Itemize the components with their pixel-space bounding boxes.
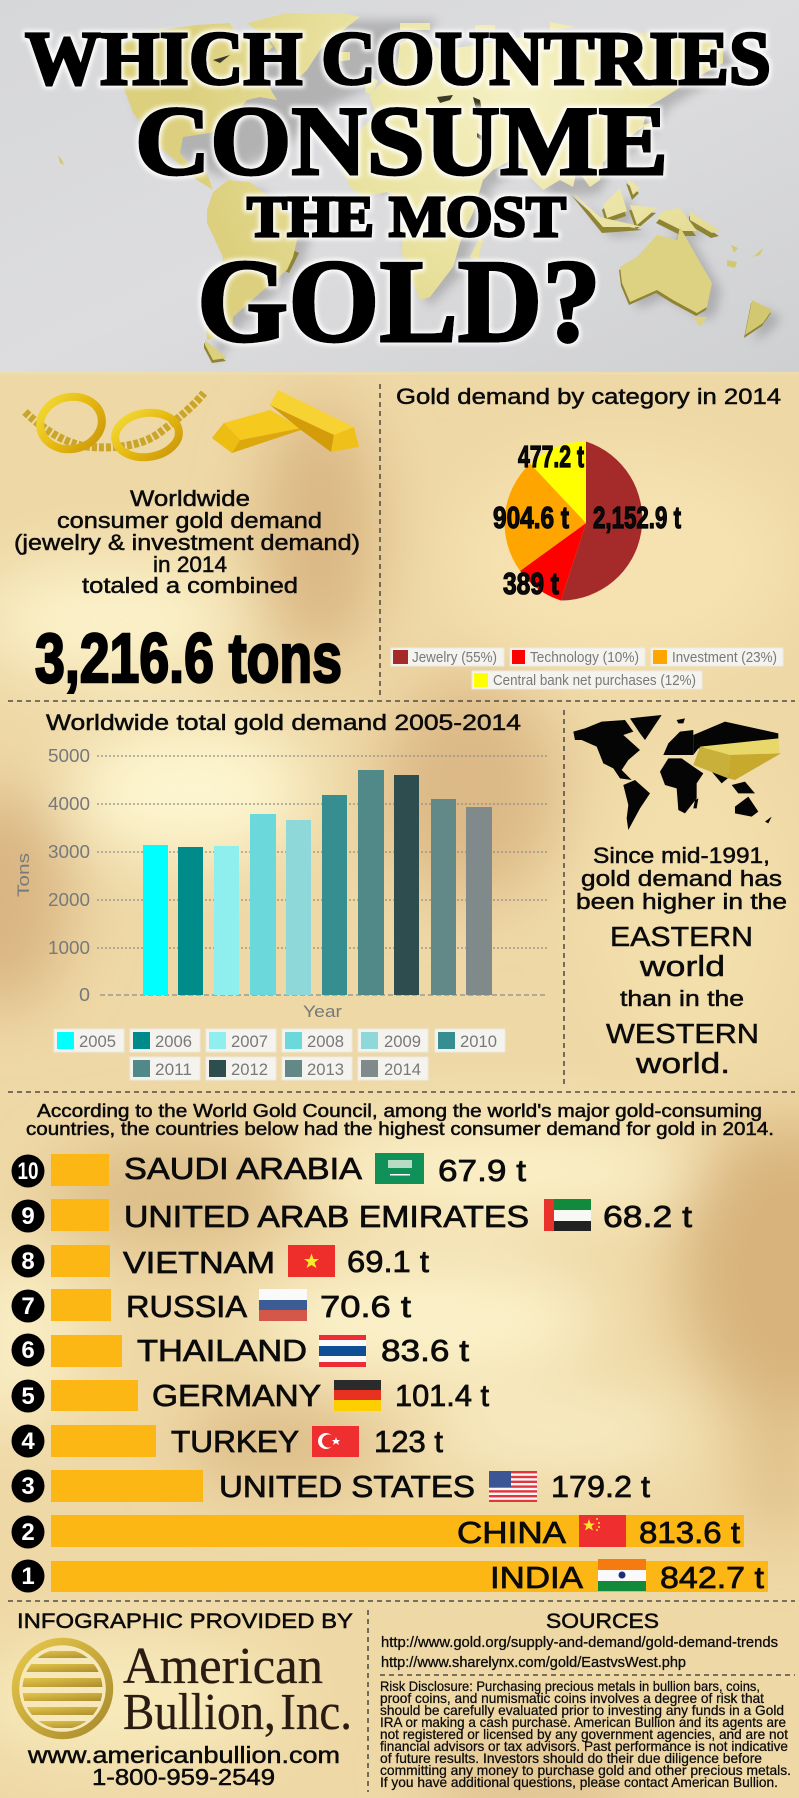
rank 10: Saudi Arabia bbox=[12, 1151, 526, 1188]
bar chart legend: 2006 bbox=[155, 1032, 192, 1051]
rank 8: Vietnam bbox=[12, 1244, 429, 1280]
pie legend: Investment (23%) bbox=[672, 649, 777, 666]
bar chart: 1000 bbox=[48, 938, 90, 958]
rank 7: Russia bbox=[12, 1289, 411, 1324]
logo: American Bullion bbox=[15, 1638, 352, 1741]
rank 10: Saudi Arabia: SAUDI ARABIA bbox=[124, 1151, 362, 1186]
rank 7: Russia: RUSSIA bbox=[126, 1289, 247, 1324]
pie chart: 904.6 t bbox=[493, 500, 569, 535]
bar chart legend: 2011 bbox=[155, 1060, 192, 1079]
risk disclosure: proof coins, and numismatic coins involves a degree of risk that bbox=[380, 1690, 764, 1706]
pie chart: 2,152.9 t bbox=[593, 500, 681, 535]
pie chart: 389 t bbox=[503, 566, 559, 601]
bar chart legend bbox=[54, 1029, 505, 1080]
text: worldwide consumer gold demand: consumer gold demand bbox=[57, 508, 322, 533]
title: WHICH COUNTRIES bbox=[25, 17, 771, 101]
map inland water bbox=[213, 55, 490, 143]
intro text bbox=[26, 1101, 774, 1139]
bar chart legend: 2005 bbox=[79, 1032, 116, 1051]
rank 5: Germany: 5 bbox=[21, 1383, 35, 1410]
text: worldwide consumer gold demand: in 2014 bbox=[153, 552, 227, 577]
panel: consumer gold demand bbox=[14, 390, 360, 697]
risk disclosure: should be carefully evaluated prior to investing any funds in a Gold bbox=[380, 1702, 784, 1718]
rank 9: United Arab Emirates: 9 bbox=[21, 1203, 35, 1230]
bar chart: Year bbox=[303, 1002, 342, 1021]
pie chart: 477.2 t bbox=[518, 439, 584, 474]
bar chart legend: 2014 bbox=[384, 1060, 421, 1079]
rank 4: Turkey: 4 bbox=[21, 1428, 35, 1455]
pie chart bbox=[493, 439, 681, 601]
text: since mid-1991: world bbox=[639, 951, 725, 983]
rank 1: India: 1 bbox=[21, 1563, 35, 1590]
rank 3: United States: UNITED STATES bbox=[219, 1469, 475, 1504]
page background: gold texture bbox=[0, 375, 799, 1798]
bar chart bbox=[14, 746, 548, 1021]
rank 1: India bbox=[12, 1559, 768, 1595]
rank 4: Turkey: 123 t bbox=[374, 1424, 443, 1459]
rank 10: Saudi Arabia: 10 bbox=[18, 1158, 38, 1185]
bar chart: 4000 bbox=[48, 794, 90, 814]
heading: sources: SOURCES bbox=[546, 1610, 659, 1633]
bar chart: 3000 bbox=[48, 842, 90, 862]
bar chart legend: 2007 bbox=[231, 1032, 268, 1051]
source links: http://www.gold.org/supply-and-demand/gold-demand-trends bbox=[381, 1634, 778, 1651]
big number: 3,216.6 tons: 3,216.6 tons bbox=[35, 619, 342, 697]
bar chart legend: 2009 bbox=[384, 1032, 421, 1051]
rank 4: Turkey bbox=[12, 1424, 443, 1459]
bar chart legend: 2008 bbox=[307, 1032, 344, 1051]
risk disclosure bbox=[380, 1678, 791, 1790]
rank 6: Thailand bbox=[12, 1333, 469, 1368]
rank 6: Thailand: 6 bbox=[21, 1337, 35, 1364]
rank 8: Vietnam: 8 bbox=[21, 1248, 35, 1275]
rank 9: United Arab Emirates: UNITED ARAB EMIRATES bbox=[124, 1199, 529, 1234]
rank 5: Germany bbox=[12, 1378, 489, 1413]
rank 2: China bbox=[12, 1515, 744, 1550]
contact details: www.americanbullion.com bbox=[27, 1742, 340, 1768]
map continents bbox=[58, 13, 772, 360]
title: GOLD? bbox=[197, 235, 601, 367]
heading: gold demand by category: Gold demand by category in 2014 bbox=[396, 384, 781, 409]
rank 8: Vietnam: 69.1 t bbox=[347, 1244, 429, 1279]
text: since mid-1991: than in the bbox=[620, 986, 744, 1011]
rank 3: United States bbox=[12, 1469, 650, 1504]
intro text: According to the World Gold Council, among the world's major gold-consuming bbox=[37, 1101, 762, 1121]
logo: American Bullion: American bbox=[123, 1638, 323, 1695]
risk disclosure: If you have additional questions, please contact American Bullion. bbox=[380, 1774, 778, 1790]
heading: worldwide total gold demand: Worldwide total gold demand 2005-2014 bbox=[46, 710, 521, 735]
rank 1: India: 842.7 t bbox=[660, 1560, 764, 1595]
panel: top ten countries bbox=[12, 1101, 774, 1595]
rank 2: China: 2 bbox=[21, 1519, 35, 1546]
panel: gold demand by category bbox=[391, 384, 783, 689]
text: since mid-1991: Since mid-1991, bbox=[593, 843, 770, 868]
title bbox=[25, 17, 771, 367]
icon: black world map with gold bar bbox=[573, 715, 781, 830]
text: since mid-1991: been higher in the bbox=[576, 889, 787, 914]
bar chart: 0 bbox=[79, 985, 90, 1005]
rank 10: Saudi Arabia: 67.9 t bbox=[438, 1153, 526, 1188]
rank 9: United Arab Emirates: 68.2 t bbox=[603, 1199, 692, 1234]
panel: infographic provided by bbox=[15, 1610, 353, 1790]
header panel: world map background bbox=[0, 0, 799, 375]
contact details bbox=[27, 1742, 340, 1790]
rank 9: United Arab Emirates bbox=[12, 1199, 692, 1234]
text: since mid-1991: EASTERN bbox=[610, 921, 753, 952]
panel: eastern vs western demand bbox=[573, 715, 787, 1080]
logo: American Bullion: Bullion, Inc. bbox=[123, 1684, 352, 1741]
risk disclosure: not registered or licensed by any government agencies, and are not bbox=[380, 1726, 788, 1742]
risk disclosure: financial advisors or tax advisors. Past performance is not indicative bbox=[380, 1738, 788, 1754]
contact details: 1-800-959-2549 bbox=[92, 1764, 275, 1790]
pie legend bbox=[391, 648, 783, 689]
bar chart legend: 2010 bbox=[460, 1032, 497, 1051]
pie legend: Technology (10%) bbox=[530, 649, 639, 666]
risk disclosure: committing any money to purchase gold and other precious metals. bbox=[380, 1762, 791, 1778]
text: worldwide consumer gold demand: (jewelry & investment demand) bbox=[14, 530, 360, 555]
rank 2: China: CHINA bbox=[457, 1515, 566, 1550]
text: worldwide consumer gold demand: totaled a combined bbox=[82, 573, 298, 598]
rank 6: Thailand: THAILAND bbox=[137, 1333, 307, 1368]
rank 5: Germany: 101.4 t bbox=[395, 1378, 489, 1413]
text: worldwide consumer gold demand bbox=[14, 486, 360, 598]
icon: gold rings and chain bbox=[25, 391, 204, 461]
map 3D edges bbox=[204, 183, 771, 363]
bar chart legend: 2013 bbox=[307, 1060, 344, 1079]
rank 7: Russia: 70.6 t bbox=[320, 1289, 411, 1324]
bar chart legend: 2012 bbox=[231, 1060, 268, 1079]
pie legend: Jewelry (55%) bbox=[412, 649, 497, 666]
rank 7: Russia: 7 bbox=[21, 1293, 35, 1320]
pie legend: Central bank net purchases (12%) bbox=[493, 672, 696, 689]
text: since mid-1991: WESTERN bbox=[606, 1018, 759, 1049]
rank 4: Turkey: TURKEY bbox=[171, 1424, 299, 1459]
bar chart: Tons bbox=[14, 853, 33, 897]
text: since mid-1991: world. bbox=[635, 1048, 730, 1080]
rank 5: Germany: GERMANY bbox=[152, 1378, 321, 1413]
risk disclosure: Risk Disclosure: Purchasing precious metals in bullion bars, coins, bbox=[380, 1678, 760, 1694]
rank 6: Thailand: 83.6 t bbox=[381, 1333, 469, 1368]
bar chart: 5000 bbox=[48, 746, 90, 766]
title: THE MOST bbox=[247, 184, 566, 249]
rank 8: Vietnam: VIETNAM bbox=[123, 1245, 275, 1280]
text: worldwide consumer gold demand: Worldwide bbox=[130, 486, 250, 511]
text: since mid-1991 bbox=[576, 843, 787, 1080]
panel: sources bbox=[380, 1610, 791, 1790]
intro text: countries, the countries below had the highest consumer demand for gold in 2014. bbox=[26, 1119, 774, 1139]
rank 2: China: 813.6 t bbox=[639, 1515, 740, 1550]
risk disclosure: of future results. Investors should do their due diligence before bbox=[380, 1750, 762, 1766]
risk disclosure: IRA or making a cash purchase. American Bullion and its agents are bbox=[380, 1714, 786, 1730]
map shadow bbox=[129, 20, 781, 364]
rank 1: India: INDIA bbox=[490, 1560, 583, 1595]
bar chart: 2000 bbox=[48, 890, 90, 910]
icon: gold bars bbox=[212, 390, 359, 453]
rank 3: United States: 179.2 t bbox=[551, 1469, 650, 1504]
title: CONSUME bbox=[135, 87, 668, 196]
heading: infographic provided by: INFOGRAPHIC PROVIDED BY bbox=[17, 1610, 353, 1633]
panel: worldwide total gold demand bbox=[14, 710, 548, 1080]
source links: http://www.sharelynx.com/gold/EastvsWest.php bbox=[381, 1654, 686, 1671]
text: since mid-1991: gold demand has bbox=[581, 866, 782, 891]
source links bbox=[381, 1634, 778, 1671]
rank 3: United States: 3 bbox=[21, 1473, 35, 1500]
